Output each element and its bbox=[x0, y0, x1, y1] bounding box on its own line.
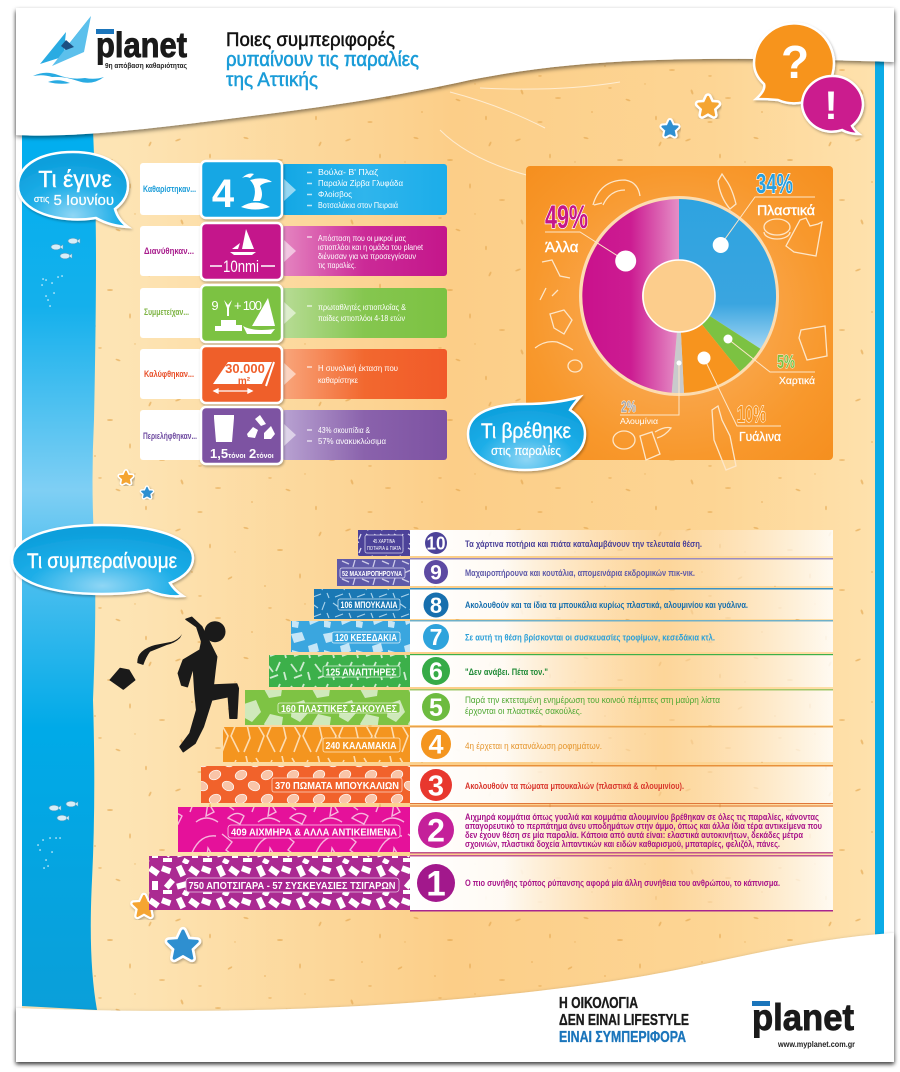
info bar: 43% σκουπίδια & bbox=[318, 425, 370, 435]
label box: Καλύφθηκαν... bbox=[144, 369, 194, 379]
bubble: what was found bbox=[468, 397, 585, 470]
pattern step bbox=[291, 621, 410, 652]
staircase row 2 bbox=[178, 804, 833, 854]
step label: 45 ΧΑΡΤΙΝΑ bbox=[373, 539, 395, 545]
icon: starfish orange left bbox=[120, 472, 132, 483]
info bar bbox=[282, 288, 447, 338]
step label: 370 ΠΩΜΑΤΑ ΜΠΟΥΚΑΛΙΩΝ bbox=[275, 780, 399, 792]
title: ρυπαίνουν τις παραλίες bbox=[226, 48, 419, 71]
donut hole bbox=[643, 260, 715, 332]
number circle bbox=[422, 693, 450, 722]
row: covered bbox=[140, 346, 447, 403]
number circle bbox=[422, 657, 450, 686]
logo: my planet top: 9η απόβαση καθαριότητας bbox=[105, 63, 187, 70]
bubble: what happened: στις bbox=[34, 194, 50, 204]
info bar: ιστιοπλόοι και η ομάδα του planet bbox=[318, 242, 424, 252]
footer slogan: Η ΟΙΚΟΛΟΓΙΑ bbox=[559, 995, 638, 1012]
fish group lower bbox=[38, 801, 78, 868]
bubble: what we conclude: Τι συμπεραίνουμε bbox=[27, 550, 177, 573]
staircase row 1 bbox=[149, 855, 833, 912]
info bar: παίδες ιστιοπλόοι 4-18 ετών bbox=[318, 313, 405, 323]
label: other: 49% bbox=[545, 199, 588, 235]
logo: my planet top: planet bbox=[96, 26, 187, 65]
label: glass: Γυάλινα bbox=[739, 429, 781, 444]
label box: Καθαρίστηκαν... bbox=[143, 184, 196, 194]
text bar bbox=[410, 530, 833, 556]
pattern step bbox=[178, 807, 410, 852]
description: 4η έρχεται η κατανάλωση ροφημάτων. bbox=[465, 741, 602, 751]
step label: 52 ΜΑΧΑΙΡΟΠΗΡΟΥΝΑ bbox=[342, 569, 402, 578]
icon box: tonnes: 1,5τόνοι bbox=[210, 446, 246, 461]
icon box: tonnes: 2τόνοι bbox=[249, 446, 274, 461]
info bar: διένυσαν για να προσεγγίσουν bbox=[318, 251, 416, 261]
label box: Διανύθηκαν... bbox=[144, 246, 194, 256]
description: Τα χάρτινα ποτήρια και πιάτα καταλαμβάνουν την τελευταία θέση. bbox=[465, 539, 702, 549]
info bar: τις παραλίες. bbox=[318, 260, 356, 270]
icon: starfish blue left bbox=[142, 488, 152, 497]
number circle bbox=[417, 864, 455, 904]
pattern step bbox=[223, 727, 410, 762]
sea strip right bbox=[875, 55, 884, 955]
description bbox=[465, 695, 720, 716]
description: Αιχμηρά κομμάτια όπως γυαλιά και κομμάτια αλουμινίου βρέθηκαν σε όλες τις παραλίες, κάνοντας bbox=[465, 812, 819, 822]
row: participated bbox=[140, 285, 447, 342]
number circle: 10 bbox=[426, 534, 446, 554]
donut ring bbox=[579, 196, 779, 396]
description: Σε αυτή τη θέση βρίσκονται οι συσκευασίες τροφίμων, κεσεδάκια κτλ. bbox=[465, 632, 715, 642]
icon box: athletes bbox=[201, 285, 282, 342]
label box bbox=[140, 410, 202, 460]
title bbox=[226, 29, 419, 91]
number circle: 8 bbox=[430, 593, 442, 618]
step label bbox=[340, 568, 405, 578]
label: glass: 10% bbox=[737, 401, 766, 427]
number circle: 3 bbox=[428, 770, 444, 802]
description: απαγορευτικό το περπάτημα άνευ υποδημάτων στην άμμο, όπως και άλλα ίδια τέρα αντικείμενα που bbox=[465, 821, 822, 831]
step label: ΠΟΤΗΡΙΑ & ΠΙΑΤΑ bbox=[367, 546, 401, 552]
bubble: exclamation mark: ! bbox=[824, 84, 838, 128]
step label: 750 ΑΠΟΤΣΙΓΑΡΑ - 57 ΣΥΣΚΕΥΑΣΙΕΣ ΤΣΙΓΑΡΩΝ bbox=[188, 880, 396, 892]
icon box: 10 nmi bbox=[201, 223, 282, 280]
description: Μαχαιροπήρουνα και κουτάλια, απομεινάρια εκδρομικών πικ-νικ. bbox=[465, 568, 695, 578]
label: paper: 5% bbox=[777, 352, 795, 372]
label box bbox=[140, 288, 202, 338]
staircase row 10 bbox=[358, 530, 833, 556]
info bar bbox=[282, 164, 447, 215]
footer white wave bbox=[16, 933, 894, 1062]
logo: my planet footer: www.myplanet.com.gr bbox=[777, 1040, 855, 1049]
description: "Δεν ανάβει. Πέτα τον." bbox=[465, 667, 548, 677]
staircase row 7 bbox=[291, 620, 833, 652]
bubble: question mark: ? bbox=[781, 36, 809, 88]
doodles of litter bbox=[535, 174, 827, 470]
staircase row 9 bbox=[337, 558, 833, 586]
number circle: 6 bbox=[429, 658, 443, 686]
description bbox=[465, 812, 822, 849]
step label: 120 ΚΕΣΕΔΑΚΙΑ bbox=[335, 633, 397, 644]
number circle: 2 bbox=[427, 812, 445, 848]
staircase row 4 bbox=[223, 726, 833, 762]
number circle: 5 bbox=[429, 694, 443, 722]
label box bbox=[140, 226, 202, 276]
icon box: 10 nmi: 10nmi bbox=[223, 257, 259, 276]
title: της Αττικής bbox=[226, 69, 318, 91]
info bar: Η συνολική έκταση που bbox=[318, 363, 398, 373]
icon box: 4 islands: 4 bbox=[212, 172, 235, 216]
row: sailed bbox=[140, 223, 447, 280]
label: other bbox=[545, 199, 636, 272]
number circle: 7 bbox=[430, 624, 442, 650]
bubble: what we conclude bbox=[12, 525, 193, 596]
icon: starfish orange bottom bbox=[134, 896, 154, 916]
fish group upper bbox=[42, 238, 80, 306]
label: plastic: Πλαστικά bbox=[757, 202, 815, 218]
footer slogan: ΕΙΝΑΙ ΣΥΜΠΕΡΙΦΟΡΑ bbox=[559, 1029, 686, 1046]
info bar bbox=[282, 349, 447, 399]
icon: starfish blue top bbox=[662, 121, 678, 135]
bubble: exclamation mark bbox=[802, 76, 863, 134]
panel: donut chart bbox=[526, 166, 833, 470]
icon: sail and waves bbox=[33, 16, 104, 84]
icon box: 30000 m2: m² bbox=[238, 376, 251, 387]
step label: 125 ΑΝΑΠΤΗΡΕΣ bbox=[326, 668, 396, 678]
info bar: πρωταθλητές ιστιοπλοΐας & bbox=[318, 302, 406, 312]
info bar: Απόσταση που οι μικροί μας bbox=[318, 233, 406, 243]
icon box: athletes: 9 bbox=[211, 298, 219, 313]
pattern step bbox=[337, 559, 410, 586]
number circle bbox=[424, 592, 448, 618]
bubble: what happened: Τι έγινε bbox=[38, 166, 112, 192]
label box bbox=[140, 349, 202, 399]
label: other: Άλλα bbox=[545, 239, 579, 256]
footer slogan: ΔΕΝ ΕΙΝΑΙ LIFESTYLE bbox=[559, 1012, 689, 1029]
label box bbox=[140, 163, 202, 215]
label: aluminium bbox=[620, 360, 682, 426]
bubble: what happened bbox=[18, 152, 128, 227]
bubble: what happened: 5 Ιουνίου bbox=[49, 192, 114, 209]
label: paper: Χαρτικά bbox=[779, 375, 815, 387]
row: included bbox=[140, 407, 447, 464]
footer slogan bbox=[559, 995, 689, 1046]
info bar: Παραλία Ζίρβα Γλυφάδα bbox=[318, 178, 403, 188]
logo: my planet footer: planet bbox=[752, 997, 854, 1038]
staircase row 3 bbox=[201, 765, 833, 803]
icon: starfish blue bottom bbox=[169, 931, 197, 958]
step label bbox=[365, 535, 403, 553]
info bar: Φλοίσβος bbox=[318, 189, 352, 199]
label: paper bbox=[724, 334, 815, 387]
staircase row 5 bbox=[245, 689, 833, 725]
icon box: 30000 m2 bbox=[201, 346, 282, 403]
sea strip left bbox=[22, 130, 97, 1010]
description: δεν έχουν θέση σε μία παραλία. Κάποια από αυτά είναι: ελαστικά αυτοκινήτων, δεκάδες μέτρα bbox=[465, 830, 804, 840]
icon box: athletes: + 100 bbox=[234, 298, 262, 313]
pattern step bbox=[149, 856, 410, 910]
label: plastic bbox=[713, 168, 815, 253]
slice: aluminium 2% bbox=[672, 332, 684, 393]
step label: 160 ΠΛΑΣΤΙΚΕΣ ΣΑΚΟΥΛΕΣ bbox=[281, 704, 397, 715]
step label: 240 ΚΑΛΑΜΑΚΙΑ bbox=[326, 741, 396, 752]
step label: 106 ΜΠΟΥΚΑΛΙΑ bbox=[340, 600, 398, 610]
bubble: what was found: Τι βρέθηκε bbox=[481, 420, 571, 443]
number circle: 4 bbox=[428, 730, 444, 760]
info bar bbox=[282, 410, 447, 460]
info bar: καθαρίστηκε bbox=[318, 375, 358, 385]
row: cleaned bbox=[140, 161, 447, 218]
icon box: tonnes bbox=[201, 407, 282, 464]
label: glass bbox=[698, 352, 781, 444]
slice: glass 10% bbox=[681, 324, 740, 393]
description: έρχονται οι πλαστικές σακούλες. bbox=[465, 706, 582, 716]
description: Ο πιο συνήθης τρόπος ρύπανσης αφορά μία άλλη συνήθεια του ανθρώπου, το κάπνισμα. bbox=[465, 878, 780, 888]
header white wave bbox=[16, 8, 894, 136]
slice: plastic 34% bbox=[679, 199, 776, 349]
bubble: what was found: στις παραλίες bbox=[491, 443, 561, 458]
slice: paper 5% bbox=[702, 316, 760, 371]
number circle bbox=[423, 624, 449, 650]
icon box: 4 islands bbox=[201, 161, 282, 218]
label box: Συμμετείχαν... bbox=[144, 307, 189, 317]
number circle bbox=[421, 729, 451, 760]
staircase row 6 bbox=[269, 654, 833, 687]
label: aluminium: Αλουμίνια bbox=[620, 416, 658, 426]
number circle: 9 bbox=[430, 562, 442, 584]
info bar: Βοτσαλάκια στον Πειραιά bbox=[318, 200, 398, 210]
logo: my planet top bbox=[33, 16, 187, 84]
bubble: question mark bbox=[754, 23, 834, 103]
label box: Περιελήφθηκαν... bbox=[143, 431, 197, 441]
icon box: 30000 m2: 30.000 bbox=[225, 361, 265, 376]
pattern step bbox=[358, 530, 410, 556]
staircase row 8 bbox=[314, 588, 833, 619]
info bar bbox=[282, 226, 447, 276]
step label: 409 ΑΙΧΜΗΡΑ & ΑΛΛΑ ΑΝΤΙΚΕΙΜΕΝΑ bbox=[231, 826, 397, 838]
pattern step bbox=[269, 655, 410, 687]
description: σχοινιών, πλαστικά δοχεία λιπαντικών και ειδών καθαρισμού, μπαταρίες, φελιζόλ, πάνες. bbox=[465, 839, 780, 849]
slice: other 49% bbox=[582, 199, 679, 393]
number circle bbox=[424, 560, 448, 584]
icon: starfish orange top bbox=[698, 97, 718, 115]
description: Παρά την εκτεταμένη ενημέρωση του κοινού πέμπτες στη μαύρη λίστα bbox=[465, 695, 720, 705]
pattern step bbox=[201, 766, 410, 803]
figure: person throwing litter bbox=[110, 617, 238, 752]
number circle: 1 bbox=[426, 864, 446, 904]
pattern step bbox=[245, 690, 410, 725]
description: Ακολουθούν και τα ίδια τα μπουκάλια κυρίως πλαστικά, αλουμινίου και γυάλινα. bbox=[465, 600, 748, 610]
title: Ποιες συμπεριφορές bbox=[226, 29, 395, 51]
description: Ακολουθούν τα πώματα μπουκαλιών (πλαστικά & αλουμινίου). bbox=[465, 781, 684, 791]
label: aluminium: 2% bbox=[621, 399, 636, 416]
number circle bbox=[420, 769, 452, 802]
pattern step bbox=[314, 589, 410, 619]
info bar: 57% ανακυκλώσιμα bbox=[318, 436, 386, 446]
info bar: Βούλα- Β' Πλαζ bbox=[318, 167, 378, 177]
number circle bbox=[418, 812, 454, 848]
label: plastic: 34% bbox=[756, 168, 793, 199]
